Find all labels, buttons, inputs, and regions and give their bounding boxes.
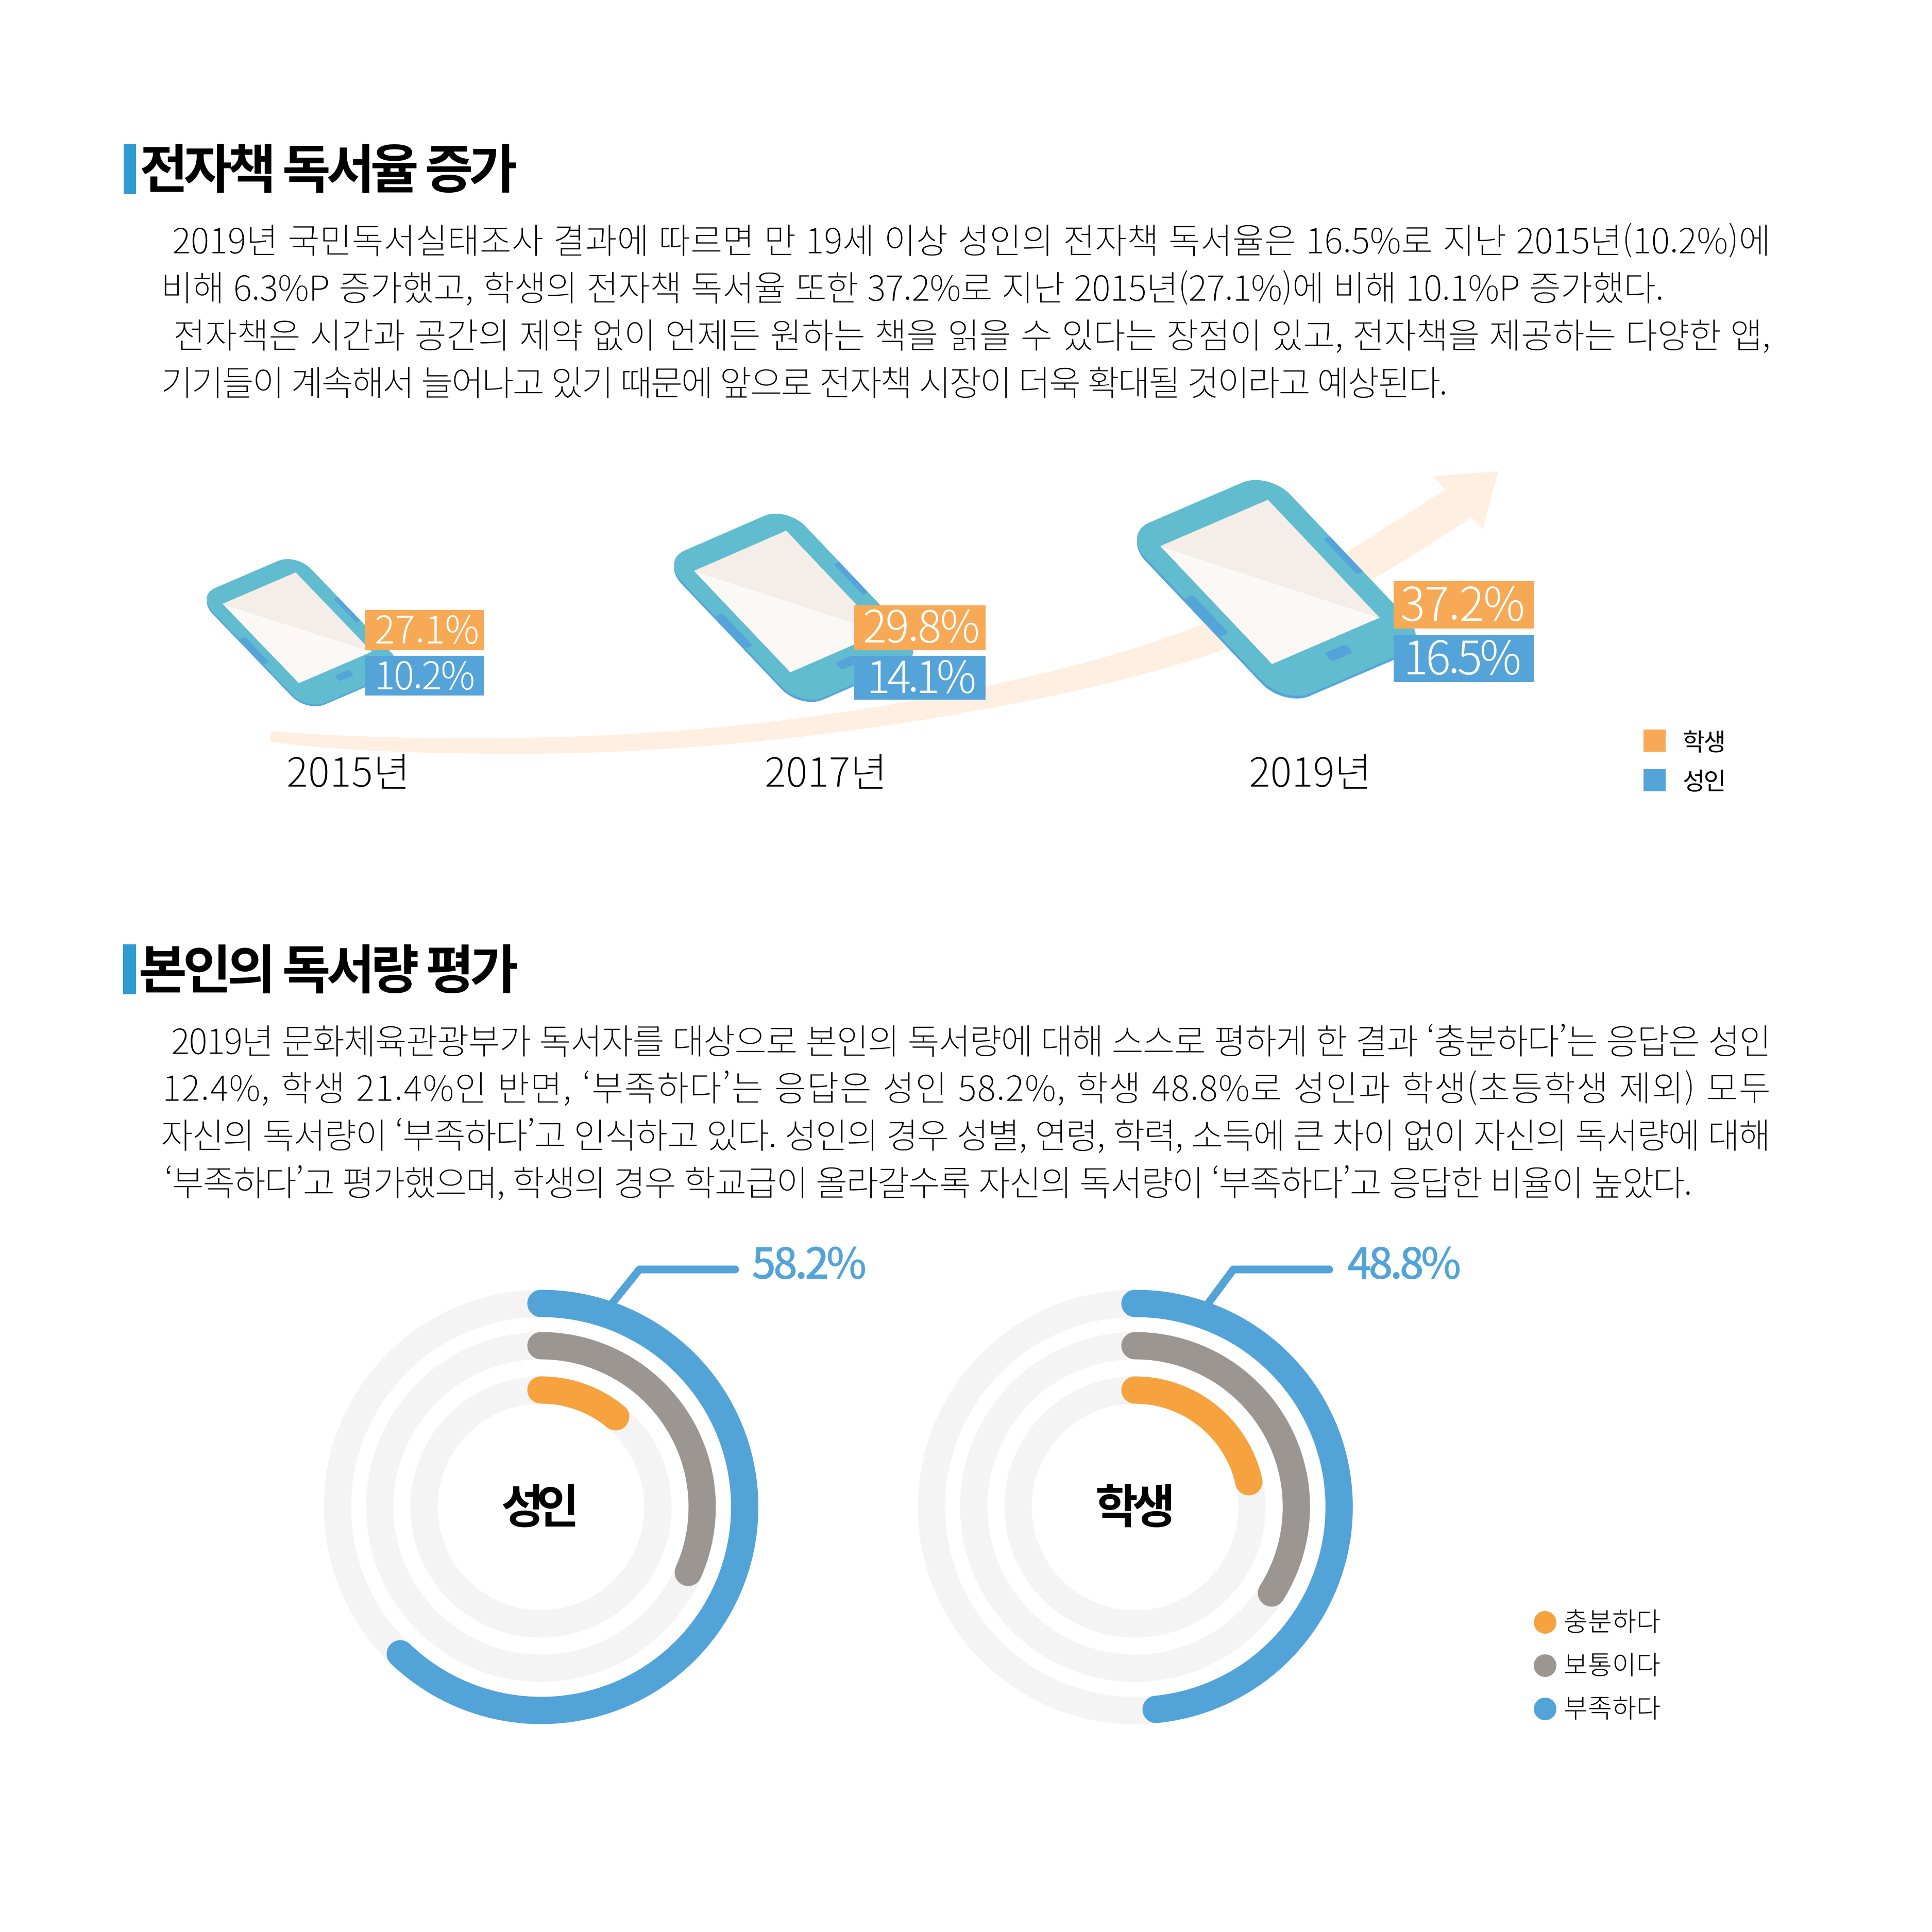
text block: self-assessment paragraph (161, 1013, 1771, 1206)
legend: response categories (1534, 1601, 1660, 1725)
chart: student donut: 48.8% (1347, 1229, 1461, 1291)
text block: self-assessment paragraph: 2019년 문화체육관광부가 독서자를 대상으로 본인의 독서량에 대해 스스로 평하게 한 결과 ‘충분하다’는 응답은 성인 (171, 1013, 1771, 1064)
data: 2019: 2019년 (1249, 741, 1371, 799)
icon: phone 2017 (660, 506, 927, 709)
chart: adult donut (337, 1229, 867, 1710)
legend: student and adult: 성인 (1683, 761, 1726, 797)
chart: adult donut: 성인 (501, 1469, 579, 1536)
panel: self-assessment of reading (123, 928, 1771, 1725)
heading: e-book reading rate: 전자책 독서율 증가 (140, 128, 517, 204)
legend: response categories: 충분하다 (1564, 1601, 1660, 1639)
data: 2015: 10.2% (375, 646, 475, 701)
icon: phone 2019 (1121, 471, 1432, 707)
data: 2017: 2017년 (765, 741, 887, 799)
chart: student donut: 학생 (1095, 1469, 1175, 1536)
text block: e-book paragraph: 기기들이 계속해서 늘어나고 있기 때문에 앞으로 전자책 시장이 더욱 확대될 것이라고 예상된다. (161, 355, 1448, 406)
icon: phone 2015 (196, 553, 407, 712)
arrow: growth trend (270, 471, 1498, 754)
text block: e-book paragraph (161, 213, 1771, 406)
data: 2019 (1249, 567, 1534, 799)
text block: self-assessment paragraph: 자신의 독서량이 ‘부족하다’고 인식하고 있다. 성인의 경우 성별, 연령, 학력, 소득에 큰 차이 없이 자신의 독서량에 대해 (161, 1108, 1771, 1159)
text block: e-book paragraph: 2019년 국민독서실태조사 결과에 따르면 만 19세 이상 성인의 전자책 독서율은 16.5%로 지난 2015년(10.2%)에 (172, 213, 1771, 264)
legend: response categories: 부족하다 (1564, 1687, 1660, 1725)
text block: self-assessment paragraph: 12.4%, 학생 21.4%인 반면, ‘부족하다’는 응답은 성인 58.2%, 학생 48.8%로 성인과 학생(초등학생 제외) 모두 (162, 1060, 1771, 1111)
data: 2017 (765, 591, 986, 799)
chart: student donut (931, 1229, 1461, 1710)
text block: e-book paragraph: 전자책은 시간과 공간의 제약 없이 언제든 원하는 책을 읽을 수 있다는 장점이 있고, 전자책을 제공하는 다양한 앱, (173, 308, 1771, 359)
data: 2017: 14.1% (867, 641, 976, 706)
legend: student and adult (1643, 722, 1726, 797)
data: 2015: 27.1% (375, 600, 479, 655)
panel: e-book reading rate (124, 128, 1771, 799)
data: 2019: 16.5% (1403, 621, 1521, 688)
legend: response categories: 보통이다 (1564, 1644, 1660, 1682)
text block: self-assessment paragraph: ‘부족하다’고 평가했으며, 학생의 경우 학교급이 올라갈수록 자신의 독서량이 ‘부족하다’고 응답한 비율이 높았다. (164, 1155, 1692, 1206)
data: 2019: 37.2% (1400, 567, 1525, 634)
data: 2017: 29.8% (863, 591, 980, 655)
text block: e-book paragraph: 비해 6.3%P 증가했고, 학생의 전자책 독서율 또한 37.2%로 지난 2015년(27.1%)에 비해 10.1%P 증가했다. (161, 260, 1664, 311)
data: 2015: 2015년 (286, 741, 410, 799)
heading: self-assessment of reading: 본인의 독서량 평가 (139, 928, 518, 1004)
data: 2015 (286, 600, 484, 799)
legend: student and adult: 학생 (1683, 722, 1726, 758)
chart: adult donut: 58.2% (752, 1229, 867, 1291)
